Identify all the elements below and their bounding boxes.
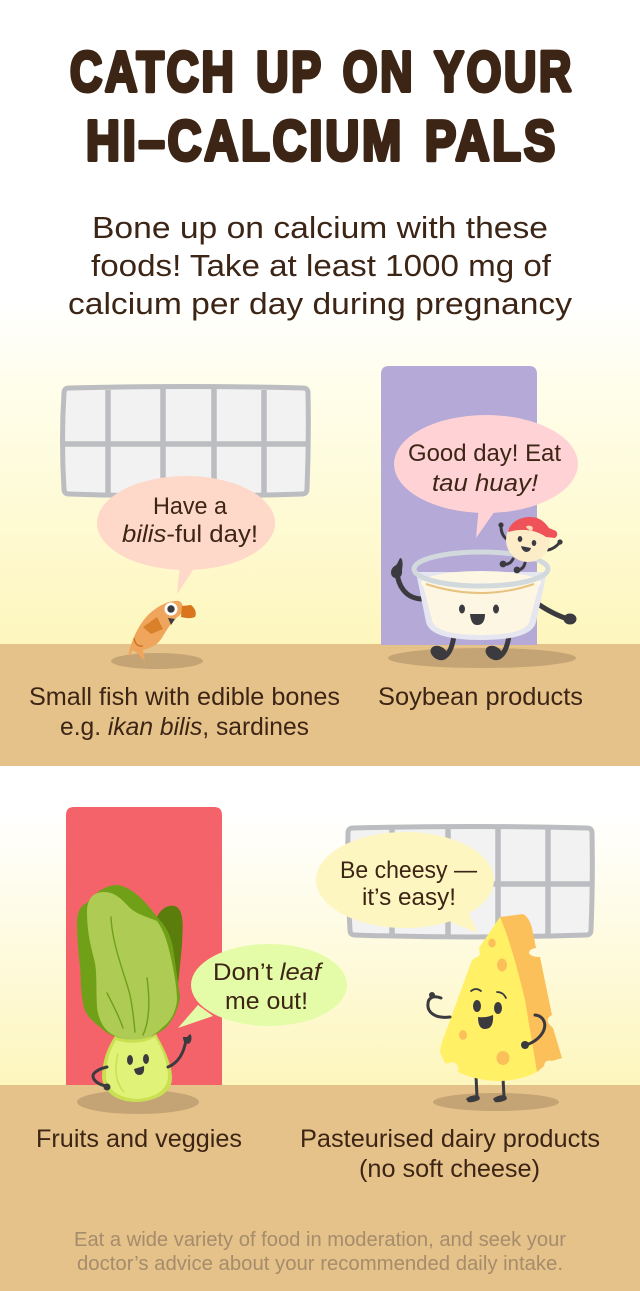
footnote: [74, 1229, 566, 1275]
door: red: [66, 807, 222, 1085]
label: veggies: Fruits and veggies: [36, 1125, 242, 1153]
speech bubble: soybean: Good day! Eat: [408, 440, 561, 467]
icon: cheese character: [428, 914, 562, 1102]
panel: soybean: [378, 366, 583, 711]
footnote: doctor’s advice about your recommended daily intake.: [77, 1253, 563, 1275]
speech bubble: veggie: me out!: [225, 988, 308, 1015]
window: right: [348, 826, 592, 937]
icon: small tofu with cap: [498, 517, 563, 573]
icon: bok choy character: [77, 885, 192, 1102]
speech bubble: fish: Have a: [153, 493, 228, 520]
label: soybean: Soybean products: [378, 683, 583, 711]
speech bubble: cheese: it’s easy!: [362, 884, 456, 911]
speech bubble: veggie: [178, 944, 347, 1028]
speech bubble: soybean: [394, 415, 578, 538]
icon: tofu bowl character: [391, 517, 576, 663]
icon: fish: [128, 601, 196, 661]
subtitle: [68, 210, 573, 321]
shadow: veggie: [77, 1090, 199, 1114]
speech bubble: fish: [97, 476, 275, 594]
panel: dairy: [300, 826, 600, 1183]
speech bubble: veggie: Don’t leaf: [213, 959, 323, 986]
panel: fruits and veggies: [36, 807, 347, 1153]
window: left: [62, 386, 308, 496]
speech bubble: soybean: tau huay!: [432, 470, 538, 497]
subtitle: foods! Take at least 1000 mg of: [91, 248, 551, 283]
speech bubble: fish: bilis-ful day!: [122, 521, 258, 548]
shadow: cheese: [433, 1093, 559, 1111]
label: small fish: [29, 683, 340, 741]
speech bubble: cheese: [316, 832, 494, 933]
label: small fish: e.g. ikan bilis, sardines: [60, 713, 309, 741]
shadow: bowl: [388, 648, 576, 668]
label: dairy: Pasteurised dairy products: [300, 1125, 600, 1153]
panel: small fish: [29, 386, 340, 741]
subtitle: Bone up on calcium with these: [92, 210, 548, 245]
subtitle: calcium per day during pregnancy: [68, 286, 573, 321]
label: dairy: [300, 1125, 600, 1183]
label: dairy: (no soft cheese): [359, 1155, 540, 1183]
title: [70, 40, 574, 173]
label: small fish: Small fish with edible bones: [29, 683, 340, 711]
footnote: Eat a wide variety of food in moderation, and seek your: [74, 1229, 566, 1251]
shadow: fish: [111, 653, 203, 669]
speech bubble: cheese: Be cheesy —: [340, 857, 477, 884]
door: purple: [381, 366, 537, 645]
